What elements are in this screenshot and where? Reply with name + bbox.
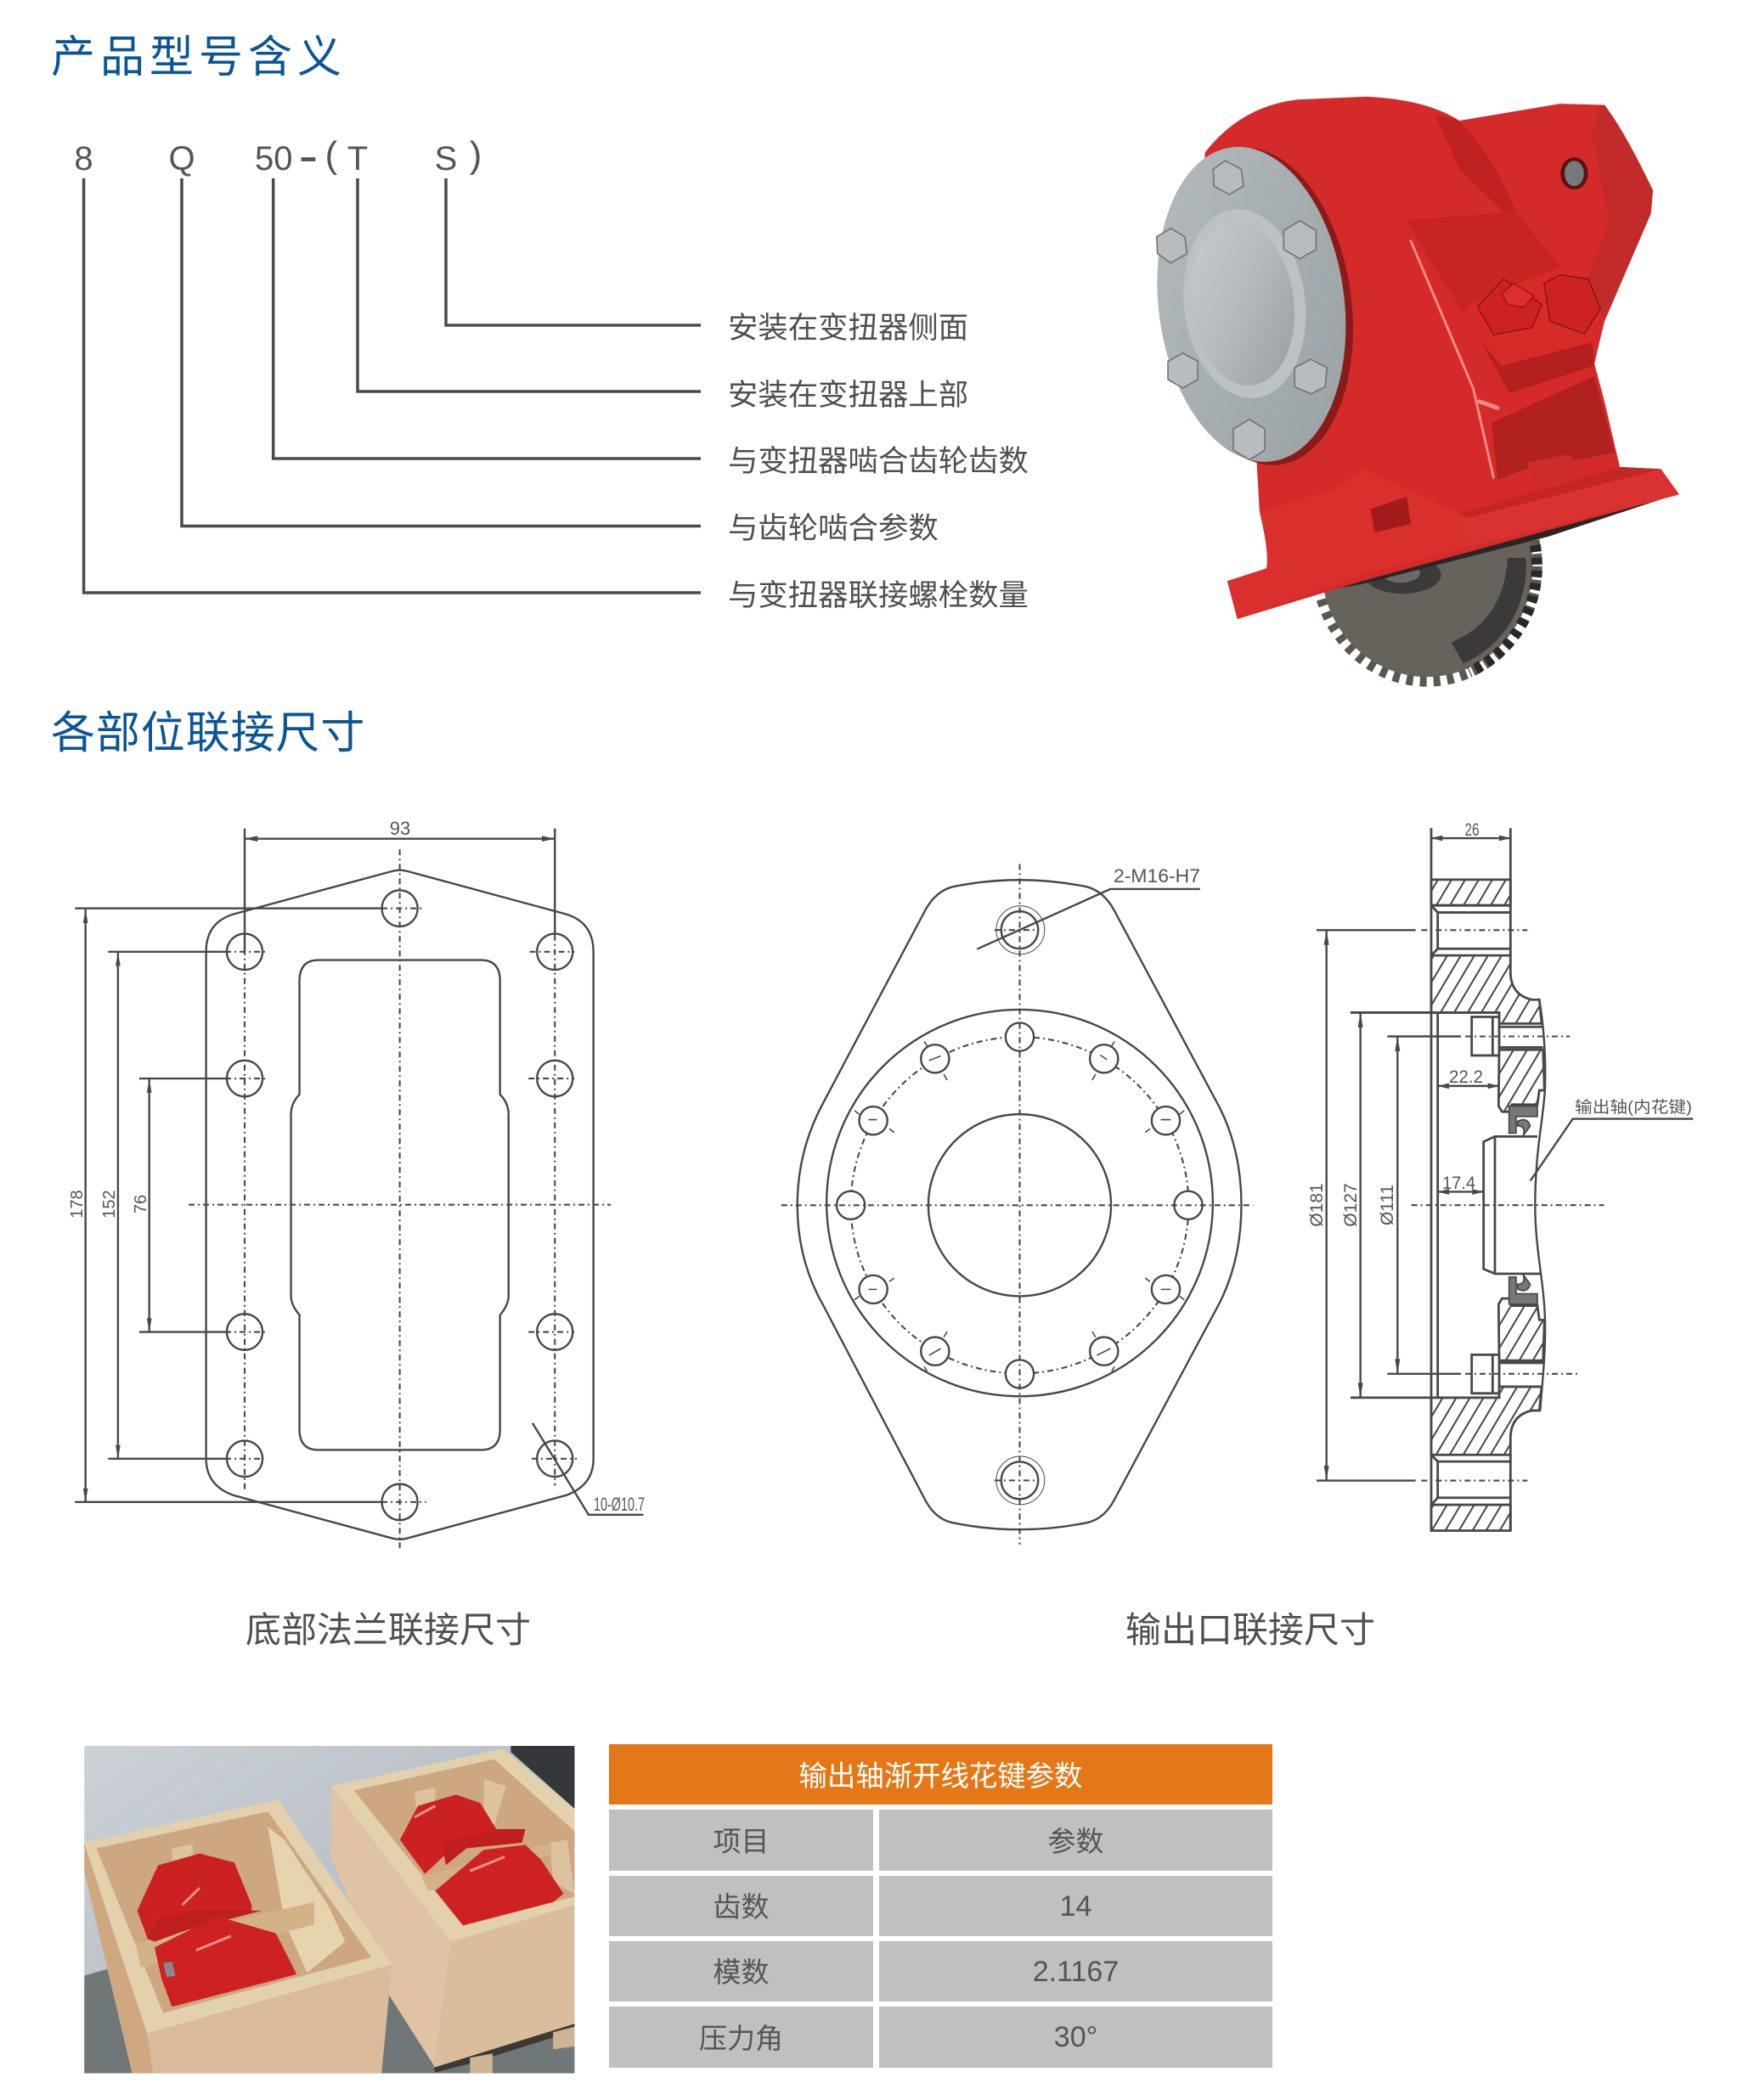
mounting bolts on bracket: [1477, 275, 1600, 335]
leader line: [977, 889, 1200, 949]
row: pressure angle: 压力角: [699, 2023, 783, 2053]
wall and floor: [84, 1746, 574, 2074]
model code characters: S: [435, 140, 457, 177]
drawing: output port section view: 17.4: [1442, 1174, 1475, 1193]
cover disc: [1138, 134, 1364, 475]
label: side mount: 安装在变扭器侧面: [728, 311, 968, 345]
table header: [609, 1744, 1272, 1804]
model code characters: -: [299, 138, 318, 176]
drawing: output port section view: Ø181: [1307, 1183, 1327, 1227]
dimension lines: [1317, 838, 1693, 1481]
title: connection dimensions: 各部位联接尺寸: [51, 709, 365, 758]
underside shadow: [1274, 498, 1663, 600]
row: item / parameter: 项目: [713, 1826, 770, 1856]
threaded holes: [996, 906, 1045, 1505]
row: pressure angle: 30°: [1054, 2021, 1097, 2053]
table: output shaft spline parameters: [609, 1744, 1272, 2068]
row: teeth: 齿数: [713, 1891, 770, 1923]
title: product model meaning: 产品型号含义: [51, 33, 347, 82]
drawing: output port section view: Ø127: [1341, 1183, 1361, 1227]
bores and outline: [1351, 828, 1543, 1531]
connector lines: [84, 178, 701, 593]
row: teeth: [609, 1876, 1272, 1936]
arrowheads: [1324, 836, 1510, 1481]
dimension lines: [75, 829, 643, 1515]
centre lines: [781, 864, 1253, 1545]
left crate: [84, 1799, 392, 2074]
drawing: bottom flange: 76: [132, 1195, 150, 1213]
cover bolts: [1157, 160, 1327, 459]
twelve bolt holes: [837, 1022, 1203, 1388]
bolt heads: [1472, 1016, 1499, 1393]
model code characters: 50: [255, 140, 292, 177]
model code characters: 8: [74, 140, 93, 177]
label: gear teeth count: 与变扭器啮合齿轮齿数: [728, 444, 1029, 478]
right crate: [330, 1748, 574, 2074]
hatched flange sections: [1431, 880, 1544, 1530]
label: gear parameter: 与齿轮啮合参数: [728, 511, 939, 545]
centre lines: [1412, 930, 1604, 1481]
drawing: output port section view: 22.2: [1449, 1067, 1483, 1087]
centre boss: [1172, 200, 1317, 407]
port outline: [798, 880, 1241, 1529]
row: pressure angle: [609, 2007, 1272, 2068]
pitch circle: [851, 1037, 1188, 1373]
output shaft: [1484, 1136, 1542, 1274]
row: item / parameter: [609, 1810, 1272, 1871]
row: module: [609, 1941, 1272, 2001]
drawing: bottom flange: 178: [68, 1190, 87, 1219]
caption: bottom flange: 底部法兰联接尺寸: [245, 1610, 531, 1650]
row: teeth: 14: [1060, 1890, 1091, 1923]
section dimension values: 26: [1464, 820, 1480, 840]
arrowheads: [83, 836, 555, 1502]
break line: [1535, 999, 1545, 1411]
housing body: [1201, 97, 1679, 619]
row: module: 模数: [713, 1956, 770, 1988]
thread label: 2-M16-H7: [1114, 865, 1200, 887]
model code diagram: [74, 136, 701, 594]
dimension values: 93: [390, 818, 410, 839]
drawing: output port section view: 输出轴(内花键): [1575, 1098, 1692, 1117]
drawing: bottom flange: 152: [100, 1190, 119, 1219]
model code characters: T: [347, 140, 368, 177]
label: bolt count: 与变扭器联接螺栓数量: [728, 578, 1029, 612]
row: item / parameter: 参数: [1048, 1826, 1104, 1856]
oil seals: [1509, 1106, 1537, 1304]
label: top mount: 安装在变扭器上部: [728, 378, 968, 412]
threaded hole: [1560, 157, 1588, 189]
model code characters: Q: [168, 140, 195, 177]
drawing: bottom flange: 10-Ø10.7: [594, 1494, 645, 1515]
caption: output port: 输出口联接尺寸: [1125, 1610, 1375, 1650]
flange window: [291, 960, 509, 1450]
flange outline: [206, 870, 594, 1540]
photo: packed gearboxes in wooden crates: [84, 1746, 574, 2074]
centre lines: [189, 849, 611, 1549]
hole tick marks: [854, 1041, 1184, 1371]
flange circles: [826, 1010, 1213, 1396]
housing shading: [1227, 105, 1679, 619]
bolt holes: [227, 890, 572, 1520]
highlights: [1411, 241, 1497, 477]
gear: [1317, 452, 1537, 681]
model code characters: [74, 134, 482, 177]
drawing: output port section view: Ø111: [1378, 1185, 1397, 1225]
cover disc rim: [1148, 135, 1372, 478]
table header: 输出轴渐开线花键参数: [799, 1761, 1082, 1792]
row: module: 2.1167: [1033, 1955, 1119, 1987]
